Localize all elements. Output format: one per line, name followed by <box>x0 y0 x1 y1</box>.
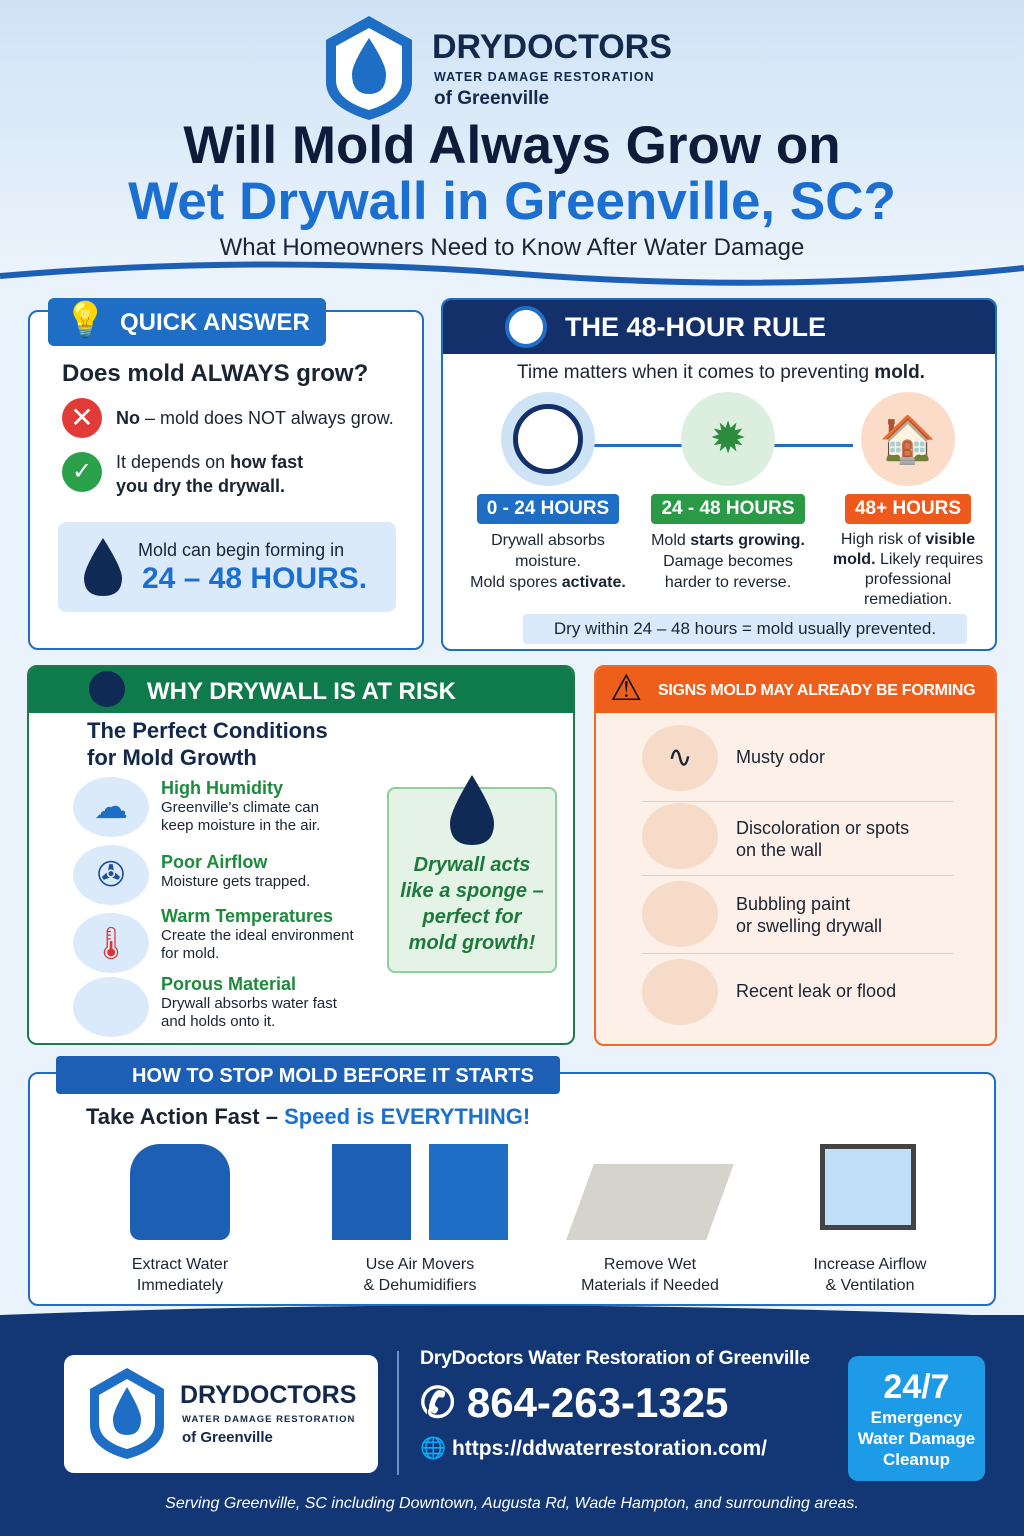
heading <box>443 300 999 354</box>
no item: No – mold does NOT always grow. <box>116 408 394 428</box>
logo: DRYDOCTORS <box>432 28 672 66</box>
callout <box>523 614 967 644</box>
callout: Dry within 24 – 48 hours = mold usually prevented. <box>554 619 936 638</box>
heading: SIGNS MOLD MAY ALREADY BE FORMING <box>658 682 975 699</box>
stage 1: 0 - 24 HOURS <box>487 498 609 519</box>
panel: why drywall <box>27 665 575 1045</box>
yes item <box>62 452 303 496</box>
stage 2: Damage becomes harder to reverse. <box>663 553 793 591</box>
icon: bulb: 💡 <box>64 301 106 339</box>
stage 2: Mold starts growing. <box>651 532 805 549</box>
steps: Extract Water <box>132 1256 228 1273</box>
list items: ✇ <box>97 856 125 894</box>
24/7 badge: 24/7 <box>883 1368 950 1406</box>
no item <box>62 398 394 438</box>
callout: 24-48 hours: Mold can begin forming in <box>138 540 344 560</box>
list items: Porous Material <box>161 974 296 994</box>
title: Will Mold Always Grow on <box>183 116 841 175</box>
stage 3: 48+ HOURS <box>855 498 961 519</box>
logo: of Greenville <box>434 88 549 109</box>
header wave <box>0 262 1024 286</box>
stage 3: High risk of visible mold. Likely requires professional remediation. <box>833 531 983 608</box>
list items: ☁ <box>94 788 128 826</box>
sign list: on the wall <box>736 840 822 860</box>
list items: Create the ideal environment <box>161 927 354 944</box>
panel: how to stop: & Ventilation <box>826 1277 914 1294</box>
list items: 🌡 <box>91 925 131 961</box>
list items: Greenville's climate can <box>161 799 319 816</box>
panel: how to stop: Use Air Movers <box>366 1256 474 1273</box>
panel: 48-hour rule <box>441 298 997 651</box>
sign list: Discoloration or spots <box>736 818 909 838</box>
panel: signs <box>594 665 997 1046</box>
contact info: 🌐 https://ddwaterrestoration.com/ <box>420 1437 767 1460</box>
panel: how to stop: Materials if Needed <box>581 1277 719 1294</box>
contact info: DryDoctors Water Restoration of Greenville <box>420 1347 810 1369</box>
24/7 badge: Water Damage <box>858 1429 975 1448</box>
24/7 badge: Cleanup <box>883 1450 950 1469</box>
stage 3: 🏠 <box>879 413 937 465</box>
heading <box>56 1056 560 1094</box>
callout: 24-48 hours: 24 – 48 HOURS. <box>142 562 367 595</box>
yes item: It depends on how fast <box>116 452 303 472</box>
sign list: ∿ <box>667 741 693 774</box>
footer logo box: WATER DAMAGE RESTORATION <box>182 1414 355 1425</box>
heading <box>48 298 326 346</box>
list items: High Humidity <box>161 778 283 798</box>
panel: signs: ⚠ <box>610 667 642 708</box>
sign list: Musty odor <box>736 747 825 767</box>
sign list: or swelling drywall <box>736 916 882 936</box>
icon: shield drop <box>326 16 412 120</box>
heading: THE 48-HOUR RULE <box>565 312 826 342</box>
title <box>128 116 896 231</box>
callout: sponge: Drywall acts <box>414 854 530 876</box>
heading: HOW TO STOP MOLD BEFORE IT STARTS <box>132 1065 534 1087</box>
list items: Moisture gets trapped. <box>161 873 310 890</box>
service area: Serving Greenville, SC including Downtown, Augusta Rd, Wade Hampton, and surrounding areas. <box>165 1495 859 1512</box>
stage 2 <box>651 392 805 591</box>
steps: Immediately <box>137 1277 223 1294</box>
panel: quick answer: Does mold ALWAYS grow? <box>62 360 368 387</box>
list items: Poor Airflow <box>161 852 267 872</box>
callout: sponge: perfect for <box>423 906 521 928</box>
stage 2: 24 - 48 HOURS <box>661 498 795 519</box>
logo <box>326 16 672 120</box>
panel: why drywall: for Mold Growth <box>87 745 257 770</box>
subtitle: What Homeowners Need to Know After Water Damage <box>220 234 804 261</box>
panel: how to stop: Take Action Fast – Speed is EVERYTHING! <box>86 1104 530 1129</box>
steps <box>130 1144 230 1294</box>
panel: why drywall: The Perfect Conditions <box>87 718 328 743</box>
list items <box>73 777 354 1037</box>
list items: Drywall absorbs water fast <box>161 995 337 1012</box>
heading <box>596 667 999 713</box>
24/7 badge <box>848 1356 985 1481</box>
title: Wet Drywall in Greenville, SC? <box>128 172 896 231</box>
callout: sponge <box>387 787 557 973</box>
contact info: ✆ 864-263-1325 <box>420 1379 728 1426</box>
panel: how to stop: Increase Airflow <box>814 1256 926 1273</box>
contact info <box>420 1347 810 1460</box>
heading: QUICK ANSWER <box>120 309 310 336</box>
footer logo box: DRYDOCTORS <box>180 1381 356 1409</box>
footer <box>0 1315 1024 1536</box>
timeline <box>543 444 853 447</box>
list items: and holds onto it. <box>161 1013 275 1030</box>
list items: for mold. <box>161 945 219 962</box>
heading <box>29 667 577 713</box>
callout: 24-48 hours <box>58 522 396 612</box>
panel: how to stop: & Dehumidifiers <box>364 1277 476 1294</box>
sign list <box>642 725 954 1025</box>
panel: how to stop <box>28 1072 996 1306</box>
stage 3 <box>833 392 983 608</box>
panel: quick answer <box>28 310 424 650</box>
sign list: Bubbling paint <box>736 894 850 914</box>
sign list: Recent leak or flood <box>736 981 896 1001</box>
callout: sponge: mold growth! <box>409 932 535 954</box>
stage 1: Mold spores activate. <box>470 574 626 591</box>
header background <box>0 0 1024 300</box>
panel: how to stop: Remove Wet <box>604 1256 696 1273</box>
footer logo box: of Greenville <box>182 1429 273 1446</box>
yes item: you dry the drywall. <box>116 476 285 496</box>
24/7 badge: Emergency <box>871 1408 962 1427</box>
yes item: ✓ <box>72 458 92 485</box>
no item: ✕ <box>70 402 94 433</box>
stage 1 <box>470 392 626 591</box>
logo: WATER DAMAGE RESTORATION <box>434 70 655 84</box>
icon: clock <box>505 306 547 348</box>
list items: Warm Temperatures <box>161 906 333 926</box>
stage 1: Drywall absorbs moisture. <box>491 532 605 570</box>
callout: sponge: like a sponge – <box>400 880 544 902</box>
panel: 48-hour rule: Time matters when it comes to preventing mold. <box>517 362 925 383</box>
stage 2: ✹ <box>710 414 746 463</box>
list items: keep moisture in the air. <box>161 817 320 834</box>
heading: WHY DRYWALL IS AT RISK <box>147 678 456 705</box>
footer logo box <box>64 1355 378 1473</box>
